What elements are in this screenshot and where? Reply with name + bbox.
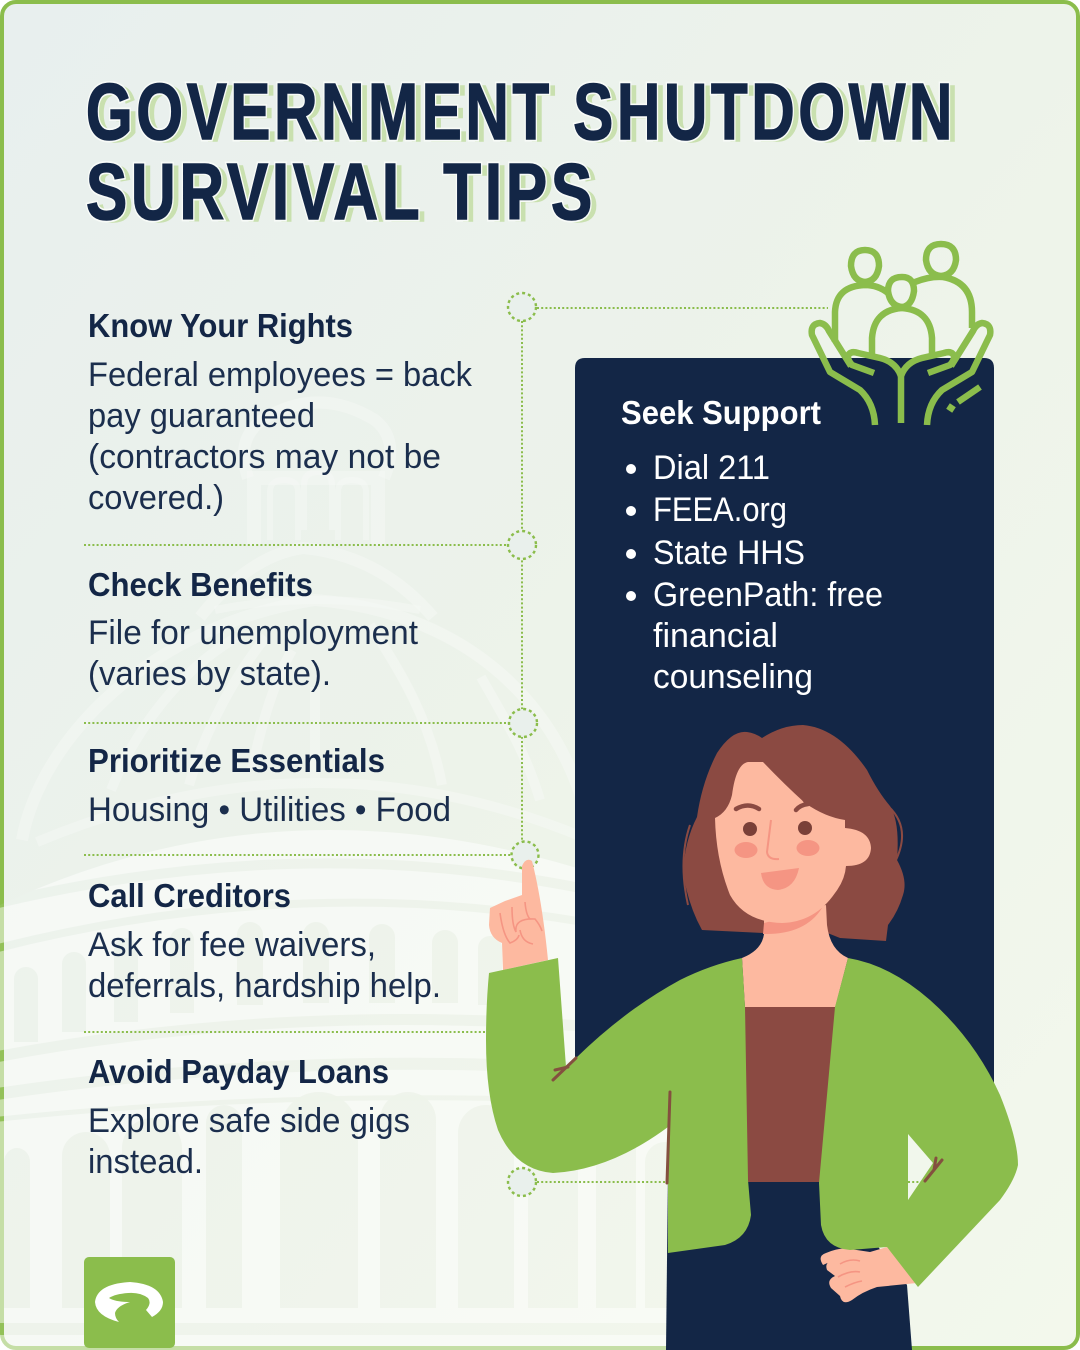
tip: know your rights: pay guaranteed xyxy=(88,397,315,435)
tip: know your rights: (contractors may not be xyxy=(88,438,441,476)
title: SURVIVAL TIPS xyxy=(86,147,596,236)
tip: call creditors: deferrals, hardship help. xyxy=(88,967,441,1005)
nose xyxy=(767,820,779,859)
title: SURVIVAL TIPS xyxy=(92,149,602,238)
tip: call creditors: Call Creditors xyxy=(88,877,291,914)
logo xyxy=(84,1257,175,1348)
tip: prioritize essentials: Prioritize Essentials xyxy=(88,742,385,779)
back hair xyxy=(683,725,905,941)
tip: know your rights xyxy=(88,307,473,517)
connector lines xyxy=(84,293,828,1196)
tip: know your rights: Federal employees = back xyxy=(88,356,473,394)
title xyxy=(86,67,962,238)
skirt xyxy=(666,1170,912,1350)
shirt xyxy=(745,1007,835,1182)
neck xyxy=(742,905,848,1008)
hair strand xyxy=(764,761,805,803)
tip: know your rights: covered.) xyxy=(88,479,224,517)
title: SURVIVAL TIPS xyxy=(86,147,596,236)
tip: check benefits: Check Benefits xyxy=(88,566,313,603)
tip: prioritize essentials: Housing • Utilities • Food xyxy=(88,791,451,829)
hand lines xyxy=(838,1260,862,1287)
tip: prioritize essentials xyxy=(88,742,451,829)
jacket left xyxy=(486,958,751,1253)
seek support list: Seek Support xyxy=(621,394,821,431)
finger lines xyxy=(500,902,542,944)
jacket folds xyxy=(553,1058,942,1183)
raised hand xyxy=(489,860,548,970)
seek support list: GreenPath: free xyxy=(653,576,883,614)
illustration: woman pointing xyxy=(486,725,1018,1350)
tip: know your rights: Know Your Rights xyxy=(88,307,353,344)
capitol watermark xyxy=(0,830,667,1350)
eyebrows xyxy=(736,804,808,810)
stray hair xyxy=(683,806,902,905)
seek support list: State HHS xyxy=(653,534,805,572)
gap dotted line xyxy=(908,1181,926,1183)
navy support panel xyxy=(575,358,994,1125)
seek support list: financial xyxy=(653,617,778,655)
tip: avoid payday loans: instead. xyxy=(88,1143,203,1181)
icon: family in hands xyxy=(812,244,990,425)
seek support list: FEEA.org xyxy=(653,491,787,529)
tip: avoid payday loans: Explore safe side gigs xyxy=(88,1102,410,1140)
mouth xyxy=(761,868,799,890)
seek support list: Dial 211 xyxy=(653,449,770,487)
jacket right xyxy=(819,958,1018,1287)
tip: check benefits: (varies by state). xyxy=(88,655,331,693)
eyes xyxy=(743,822,757,836)
tip: call creditors: Ask for fee waivers, xyxy=(88,926,376,964)
cheeks xyxy=(734,842,758,858)
face xyxy=(715,762,871,923)
sleeve gap xyxy=(908,1134,933,1200)
tip: avoid payday loans: Avoid Payday Loans xyxy=(88,1053,389,1090)
tip: call creditors xyxy=(88,877,441,1005)
neck shadow xyxy=(763,908,822,934)
tip: check benefits xyxy=(88,566,419,693)
hip hand xyxy=(821,1247,917,1302)
tip: avoid payday loans xyxy=(88,1053,410,1181)
seek support list: counseling xyxy=(653,658,813,696)
tip: check benefits: File for unemployment xyxy=(88,614,419,652)
seek support list xyxy=(621,394,883,696)
